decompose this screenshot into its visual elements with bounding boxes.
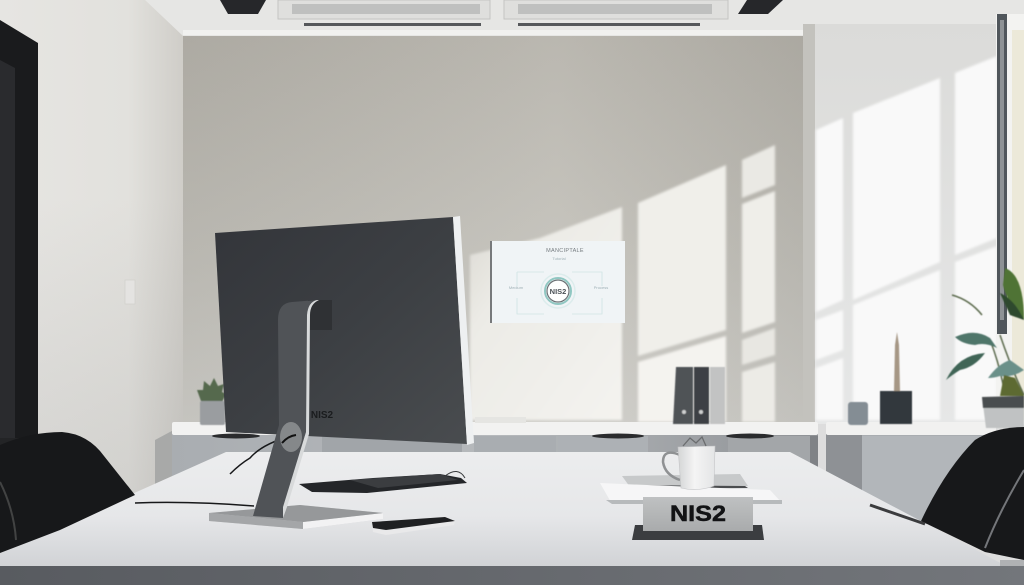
cables <box>135 436 291 506</box>
sign plate <box>643 497 753 531</box>
light switch <box>125 280 135 304</box>
monitor label: NIS2 <box>311 410 334 421</box>
binders <box>673 367 725 424</box>
door frame <box>0 20 38 552</box>
right chair <box>870 427 1024 560</box>
sign base <box>632 525 764 540</box>
NIS2 desk sign <box>632 497 764 540</box>
papers on cabinet <box>475 417 526 423</box>
tablet on desk <box>299 471 467 493</box>
right wall pillar with sunlight <box>803 24 997 424</box>
back wall <box>183 36 805 436</box>
left chair <box>0 432 135 553</box>
desk <box>0 452 1024 585</box>
poster on back wall: Medium <box>509 285 524 290</box>
cabinet handles <box>212 434 774 438</box>
right potted plant <box>946 268 1024 428</box>
poster title: MANCIPTALE <box>546 248 584 254</box>
poster on back wall: Process <box>594 285 608 290</box>
poster on back wall <box>490 241 625 323</box>
right cabinet <box>826 422 1006 524</box>
sunlight patches on back wall <box>470 145 775 422</box>
smartphone <box>372 517 455 535</box>
sculpture on black box <box>880 332 912 424</box>
monitor stand <box>253 300 319 518</box>
monitor <box>215 216 474 445</box>
cable port <box>280 422 302 452</box>
coffee mug <box>663 437 715 490</box>
back cabinet <box>172 422 818 494</box>
small cup on right cabinet <box>848 402 868 425</box>
monitor base <box>209 505 383 529</box>
window <box>996 14 1024 424</box>
left wall <box>0 0 183 560</box>
monitor hinge <box>308 300 332 330</box>
left potted plant <box>197 378 226 425</box>
ceiling with vents <box>0 0 1024 40</box>
papers and notebook <box>600 474 782 504</box>
sign text: NIS2 <box>670 501 726 526</box>
poster diagram <box>517 272 602 314</box>
poster central ring: NIS2 <box>550 287 566 296</box>
poster on back wall: Tutorial <box>552 256 566 261</box>
